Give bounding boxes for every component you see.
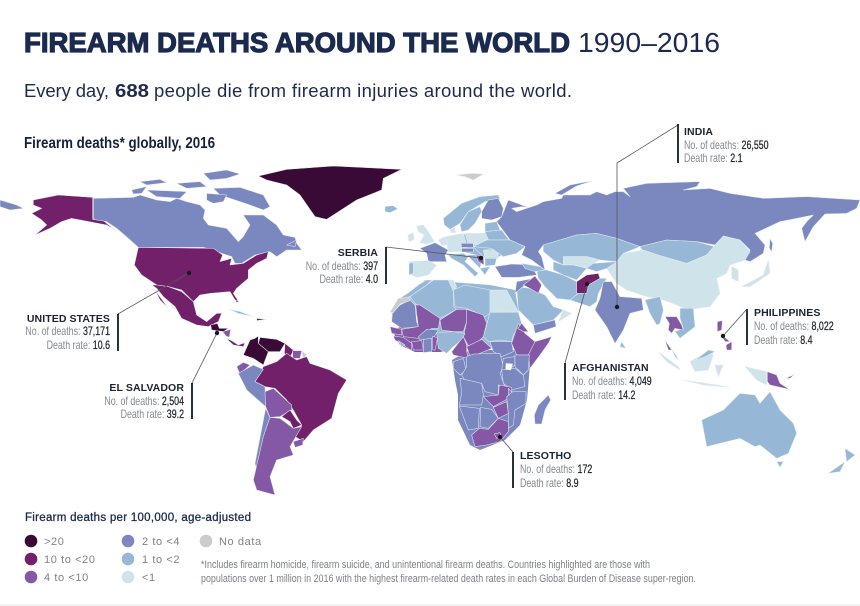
callout: Philippines: Death rate: 8.4 [754, 335, 813, 347]
southeast asia and pacific [658, 308, 795, 389]
callout: El Salvador: Death rate: 39.2 [121, 409, 184, 421]
callout: United States [25, 271, 191, 352]
callout: Afghanistan [565, 282, 652, 402]
legend: 1 to <2 [142, 554, 180, 566]
legend: <1 [142, 572, 156, 584]
callout: Serbia [306, 247, 483, 286]
callout: United States: UNITED STATES [27, 313, 110, 325]
callout: El Salvador: No. of deaths: 2,504 [104, 396, 184, 408]
callout: Afghanistan: AFGHANISTAN [572, 362, 649, 374]
callout: Afghanistan: Death rate: 14.2 [572, 390, 636, 402]
map heading: Firearm deaths* globally, 2016 [24, 135, 215, 152]
callout: Philippines: No. of deaths: 8,022 [754, 321, 834, 333]
callout: India: INDIA [684, 126, 713, 138]
subtitle: 688 [115, 80, 149, 101]
europe [385, 195, 545, 277]
north america [0, 166, 402, 327]
land base [392, 232, 530, 450]
legend: 4 to <10 [44, 572, 89, 584]
footnote: *Includes firearm homicide, firearm suicide, and unintentional firearm deaths. Countries highlighted are those with [201, 559, 650, 571]
legend: >20 [44, 536, 64, 548]
callout: Philippines [721, 307, 834, 347]
oceania and islands [620, 342, 855, 473]
legend: 10 to <20 [44, 554, 96, 566]
legend: No data [219, 536, 262, 548]
central america and caribbean [211, 300, 307, 365]
footnote: populations over 1 million in 2016 with the highest firearm-related death rates in each Global Burden of Disease super-region. [201, 573, 696, 585]
callout: India [615, 124, 769, 309]
world map [0, 166, 860, 495]
subtitle: people die from firearm injuries around the world. [154, 80, 572, 101]
callout: El Salvador: EL SALVADOR [109, 382, 184, 394]
eurasia base [457, 173, 860, 343]
callout: United States: No. of deaths: 37,171 [25, 326, 110, 338]
title: 1990–2016 [578, 27, 720, 58]
subtitle: Every day, [24, 80, 109, 101]
callout: Afghanistan: No. of deaths: 4,049 [572, 376, 652, 388]
callout: United States: Death rate: 10.6 [47, 340, 110, 352]
title: FIREARM DEATHS AROUND THE WORLD [24, 27, 570, 58]
africa south [453, 353, 551, 447]
callout: El Salvador [104, 331, 219, 421]
callout: Philippines: PHILIPPINES [754, 307, 820, 319]
callout: India: Death rate: 2.1 [684, 153, 743, 165]
footnote [201, 559, 696, 585]
callout: Serbia: No. of deaths: 397 [306, 261, 378, 273]
legend [25, 512, 262, 584]
callout: Lesotho: LESOTHO [520, 450, 571, 462]
callout: India: No. of deaths: 26,550 [684, 140, 769, 152]
callout: Lesotho: No. of deaths: 172 [520, 464, 593, 476]
africa north [390, 280, 552, 368]
callout: Serbia: SERBIA [338, 247, 378, 259]
legend: Firearm deaths per 100,000, age-adjusted [25, 512, 251, 524]
south america [237, 353, 347, 495]
legend: 2 to <4 [142, 536, 180, 548]
callout: Lesotho: Death rate: 8.9 [520, 478, 579, 490]
callout: Serbia: Death rate: 4.0 [319, 274, 378, 286]
callout: Lesotho [498, 435, 593, 490]
